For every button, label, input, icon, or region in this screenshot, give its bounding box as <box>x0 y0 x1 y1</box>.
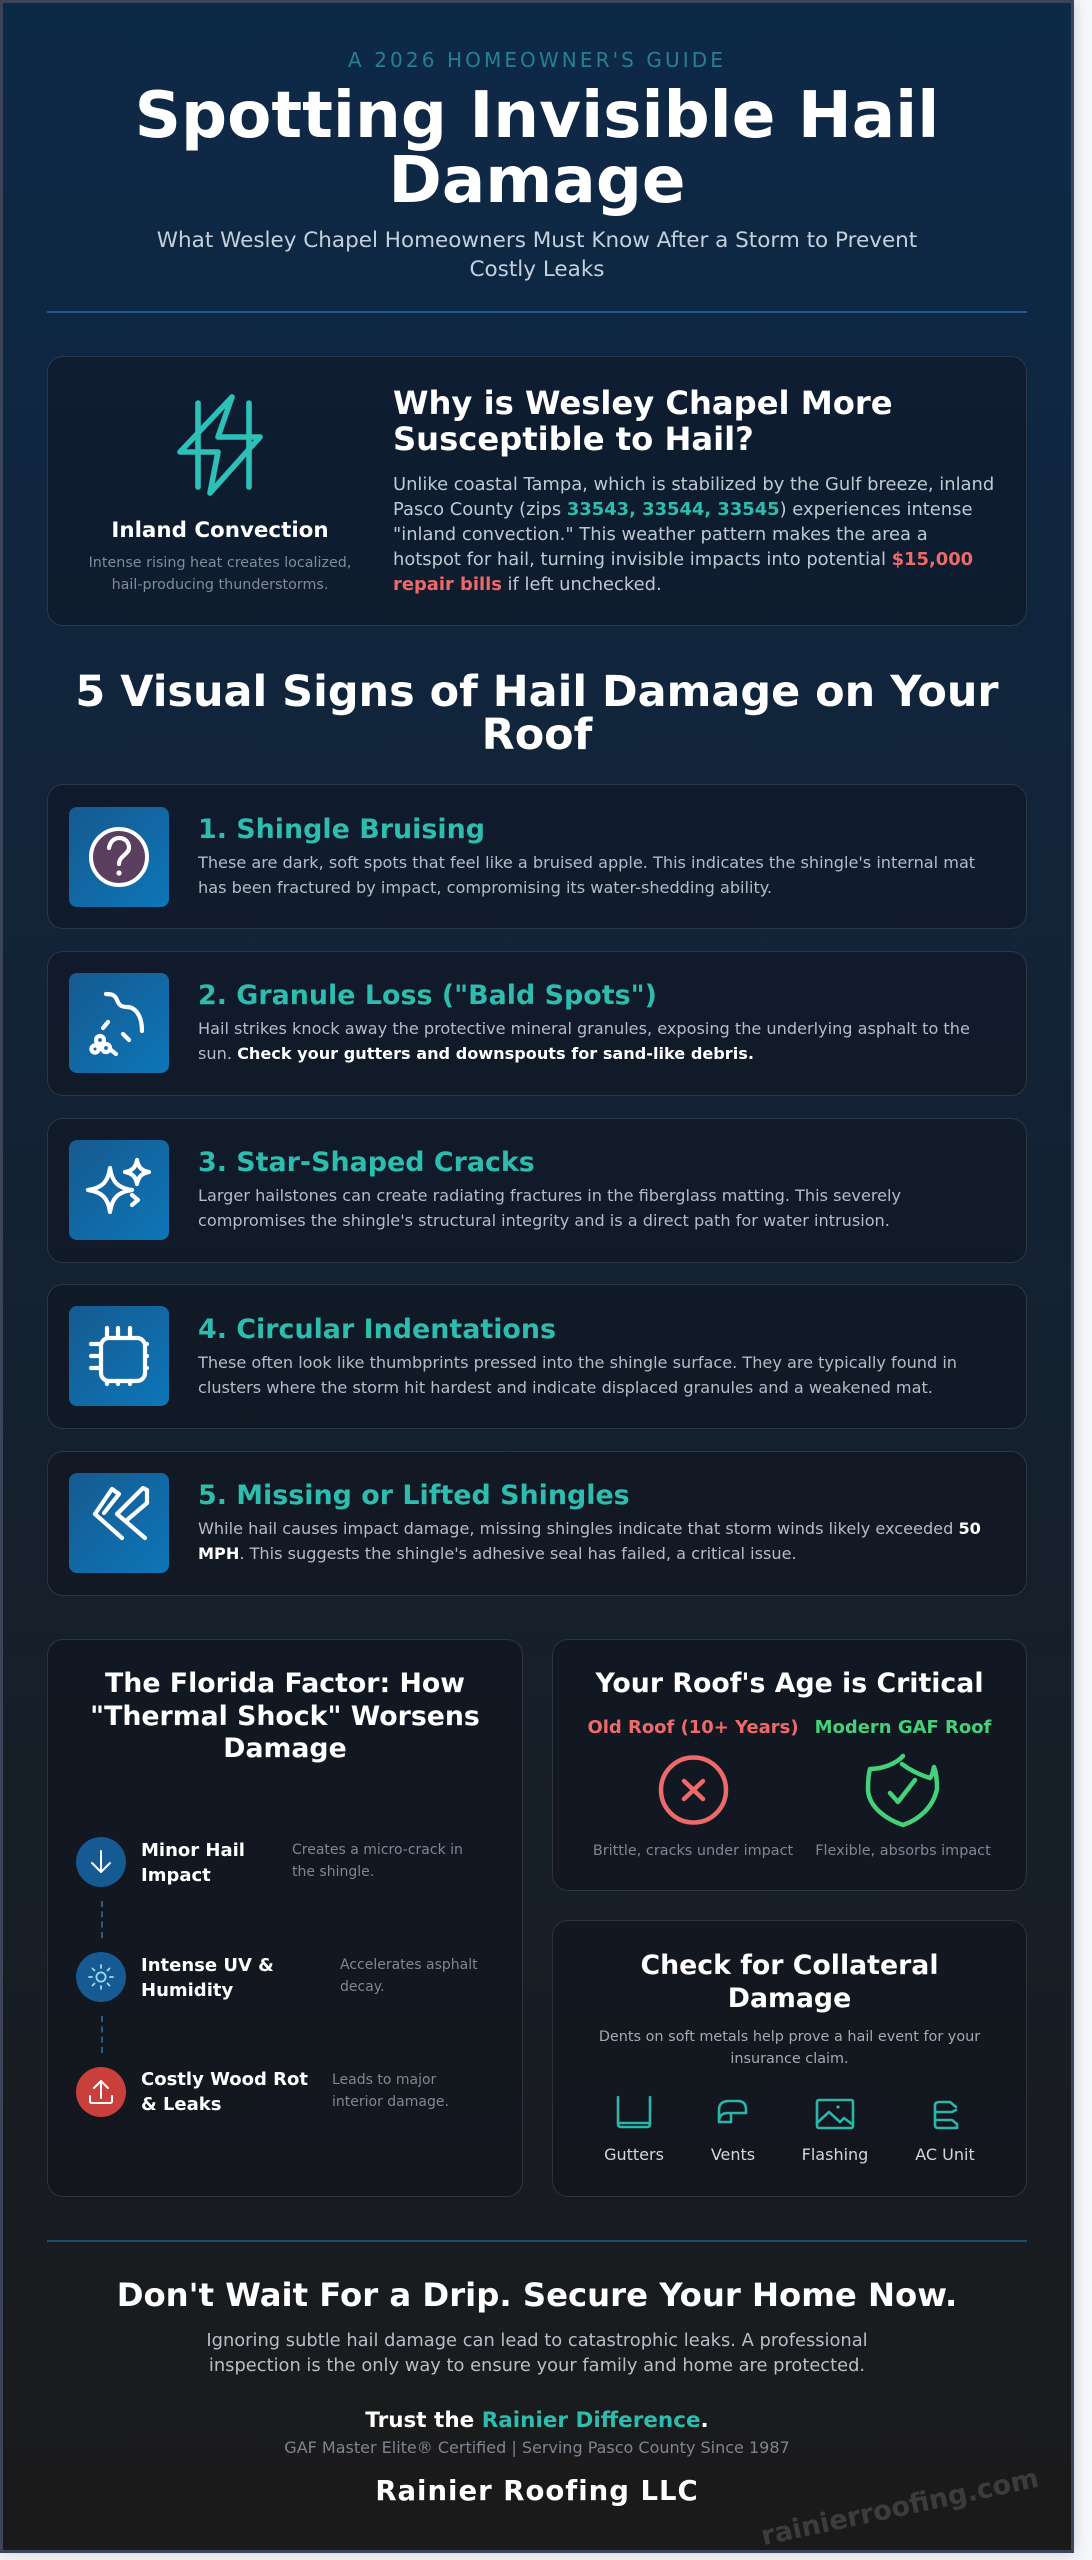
icon: inland convection storm <box>177 394 263 496</box>
trust line: Trust the Rainier Difference. <box>365 2408 709 2433</box>
panel: sign 4 <box>47 1284 1027 1429</box>
sign 2 text: sun. Check your gutters and downspouts for sand-like debris. <box>198 1044 754 1063</box>
title: Spotting Invisible Hail <box>135 78 939 153</box>
step 2 label: Humidity <box>141 1980 233 2001</box>
section heading: Roof <box>482 710 592 760</box>
why heading: Susceptible to Hail? <box>393 420 754 458</box>
sign 5 heading: 5. Missing or Lifted Shingles <box>198 1480 630 1511</box>
sign 1 text: These are dark, soft spots that feel like a bruised apple. This indicates the shingle's internal mat <box>198 853 975 872</box>
icon: flashing <box>816 2098 854 2130</box>
sign 1 heading: 1. Shingle Bruising <box>198 814 485 845</box>
title: Damage <box>388 143 686 218</box>
step 1 label: Minor Hail <box>141 1840 245 1861</box>
panel: collateral damage <box>552 1920 1027 2197</box>
step 2 icon: UV sun <box>76 1952 126 2002</box>
collateral heading: Damage <box>728 1982 851 2014</box>
subtitle: Costly Leaks <box>470 257 604 282</box>
sign 4 text <box>198 1353 957 1397</box>
connector dashes <box>101 2016 103 2053</box>
step 2 label: Intense UV & <box>141 1955 274 1976</box>
label: flashing: Flashing <box>802 2145 868 2164</box>
old roof label: Old Roof (10+ Years) <box>587 1717 799 1738</box>
roof age heading: Your Roof's Age is Critical <box>596 1668 984 1699</box>
subtitle <box>157 228 917 282</box>
icon caption text: hail-producing thunderstorms. <box>112 576 328 592</box>
icon: bruise question <box>69 807 169 907</box>
Florida factor heading: "Thermal Shock" Worsens <box>90 1700 480 1732</box>
icon caption text: Intense rising heat creates localized, <box>89 555 351 571</box>
panel: sign 5 <box>47 1451 1027 1596</box>
why body text: "inland convection." This weather pattern makes the area a <box>393 524 928 545</box>
step 3 description: Leads to major <box>332 2072 436 2088</box>
icon: modern roof shield <box>866 1754 940 1828</box>
connector dashes <box>101 1901 103 1938</box>
header divider <box>47 311 1027 313</box>
watermark: rainierroofing.com <box>758 2463 1041 2552</box>
step 1 description: the shingle. <box>292 1864 374 1880</box>
subtitle: What Wesley Chapel Homeowners Must Know After a Storm to Prevent <box>157 228 917 253</box>
step 1 icon: hail impact <box>76 1837 126 1887</box>
icon: AC unit <box>934 2100 958 2130</box>
sign 2 heading: 2. Granule Loss ("Bald Spots") <box>198 980 657 1011</box>
panel: sign 1 <box>47 784 1027 929</box>
step 2 description <box>340 1957 478 1995</box>
title <box>135 78 939 218</box>
label: AC unit: AC Unit <box>915 2145 975 2164</box>
sign 3 heading: 3. Star-Shaped Cracks <box>198 1147 535 1178</box>
Florida factor heading: Damage <box>223 1733 347 1764</box>
collateral text <box>599 2029 980 2067</box>
icon: lifted shingles chevrons <box>69 1473 169 1573</box>
panel: sign 2 <box>47 951 1027 1096</box>
sign 3 text <box>198 1186 901 1230</box>
icon: circular indentations chip <box>69 1306 169 1406</box>
icon: granule loss <box>69 973 169 1073</box>
sign 4 text: clusters where the storm hit hardest and indicate displaced granules and a weakened mat. <box>198 1378 933 1397</box>
icon: gutters <box>616 2096 652 2128</box>
step 3 label: Costly Wood Rot <box>141 2069 308 2090</box>
step 1 description <box>292 1842 463 1880</box>
step 2 description: decay. <box>340 1979 385 1995</box>
step 3 description <box>332 2072 449 2110</box>
Florida factor heading: The Florida Factor: How <box>105 1668 465 1699</box>
sign 5 text: While hail causes impact damage, missing shingles indicate that storm winds likely exceeded 50 <box>198 1519 981 1538</box>
collateral text: Dents on soft metals help prove a hail event for your <box>599 2029 980 2045</box>
call to action text <box>206 2330 868 2376</box>
why body text <box>393 474 994 595</box>
icon caption heading: Inland Convection <box>111 518 329 543</box>
step 3 label: & Leaks <box>141 2094 221 2115</box>
sign 1 text: has been fractured by impact, compromising its water-shedding ability. <box>198 878 772 897</box>
panel: why Wesley Chapel <box>47 356 1027 626</box>
step 1 label <box>141 1840 245 1886</box>
icon: sparkle cracks <box>69 1140 169 1240</box>
icon caption text <box>89 555 351 592</box>
step 1 label: Impact <box>141 1865 211 1886</box>
collateral heading <box>640 1950 939 2014</box>
sign 2 text <box>198 1019 970 1063</box>
certification line: GAF Master Elite® Certified | Serving Pasco County Since 1987 <box>284 2438 790 2457</box>
call to action heading: Don't Wait For a Drip. Secure Your Home Now. <box>117 2276 957 2314</box>
section heading: 5 Visual Signs of Hail Damage on Your <box>75 667 999 717</box>
sign 5 text <box>198 1519 981 1563</box>
collateral heading: Check for Collateral <box>640 1950 939 1981</box>
sign 4 heading: 4. Circular Indentations <box>198 1314 556 1345</box>
step 3 label <box>141 2069 308 2115</box>
icon: old roof X <box>658 1755 728 1825</box>
sign 5 text: MPH. This suggests the shingle's adhesive seal has failed, a critical issue. <box>198 1544 797 1563</box>
why body text: repair bills if left unchecked. <box>393 574 662 595</box>
step 2 label <box>141 1955 274 2001</box>
step 1 description: Creates a micro-crack in <box>292 1842 463 1858</box>
why heading: Why is Wesley Chapel More <box>393 384 893 422</box>
eyebrow label: A 2026 HOMEOWNER'S GUIDE <box>348 48 726 72</box>
sign 3 text: Larger hailstones can create radiating fractures in the fiberglass matting. This severely <box>198 1186 901 1205</box>
label: vents: Vents <box>711 2145 755 2164</box>
sign 1 text <box>198 853 975 897</box>
footer divider <box>47 2240 1027 2242</box>
call to action text: Ignoring subtle hail damage can lead to catastrophic leaks. A professional <box>206 2330 868 2351</box>
modern roof label: Modern GAF Roof <box>815 1717 991 1738</box>
modern roof description: Flexible, absorbs impact <box>815 1843 991 1859</box>
step 3 description: interior damage. <box>332 2094 449 2110</box>
panel: roof age <box>552 1639 1027 1891</box>
panel: Florida factor <box>47 1639 523 2197</box>
section heading <box>75 667 999 760</box>
step 3 icon: wood rot <box>76 2067 126 2117</box>
panel: sign 3 <box>47 1118 1027 1263</box>
sign 4 text: These often look like thumbprints pressed into the shingle surface. They are typically found in <box>198 1353 957 1372</box>
icon: vents <box>718 2100 748 2124</box>
why heading <box>393 384 893 458</box>
sign 3 text: compromises the shingle's structural integrity and is a direct path for water intrusion. <box>198 1211 890 1230</box>
collateral text: insurance claim. <box>730 2051 849 2067</box>
Florida factor heading <box>90 1668 480 1764</box>
label: gutters: Gutters <box>604 2145 664 2164</box>
sign 2 text: Hail strikes knock away the protective mineral granules, exposing the underlying asphalt to the <box>198 1019 970 1038</box>
company name: Rainier Roofing LLC <box>375 2475 699 2507</box>
why body text: hotspot for hail, turning invisible impacts into potential $15,000 <box>393 549 973 570</box>
old roof description: Brittle, cracks under impact <box>593 1843 793 1859</box>
why body text: Unlike coastal Tampa, which is stabilized by the Gulf breeze, inland <box>393 474 994 495</box>
why body text: Pasco County (zips 33543, 33544, 33545) experiences intense <box>393 499 972 520</box>
step 2 description: Accelerates asphalt <box>340 1957 478 1973</box>
call to action text: inspection is the only way to ensure your family and home are protected. <box>209 2355 865 2376</box>
